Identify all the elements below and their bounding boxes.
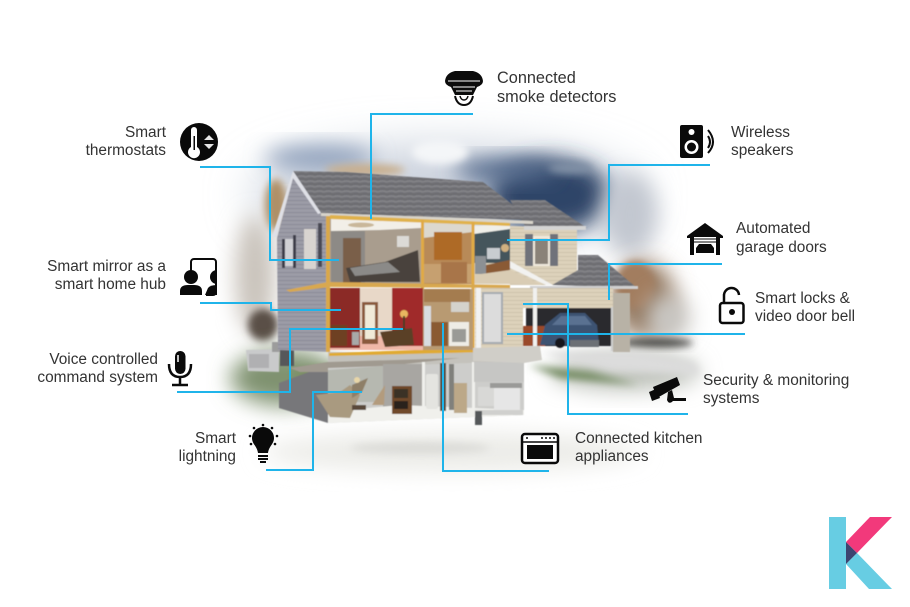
- garage pillar: [613, 293, 630, 352]
- garage with van: [523, 288, 615, 351]
- label: lighting: Smart: [195, 430, 237, 447]
- line: speakers: [507, 165, 710, 240]
- sofa and lamp: [316, 385, 360, 418]
- line: kitchen appliances: [443, 323, 549, 471]
- line: garage doors: [609, 264, 722, 300]
- line: smart locks: [507, 333, 745, 335]
- basement rooms: [316, 361, 524, 423]
- garage roof: [552, 255, 637, 288]
- label: smart mirror: smart home hub: [55, 276, 166, 293]
- icon: thermostat: [180, 123, 218, 161]
- lower floor: kitchen: [423, 289, 473, 350]
- icon: wireless speaker: [680, 125, 713, 158]
- line: lighting: [266, 392, 362, 470]
- sump pit: [475, 411, 482, 425]
- entry porch with front door: [475, 288, 536, 350]
- upper floor: bedroom: [329, 216, 423, 284]
- icon: smoke detector: [445, 71, 483, 105]
- label: voice control: command system: [37, 369, 158, 386]
- line: thermostats: [200, 167, 339, 260]
- label: smoke detectors: [497, 69, 616, 106]
- icon: security camera: [649, 377, 686, 403]
- label: voice control: [37, 351, 158, 386]
- line: smart mirror: [200, 303, 341, 310]
- basement outer wall and concrete: [279, 365, 328, 423]
- label: kitchen appliances: appliances: [575, 448, 649, 465]
- label: security: [703, 372, 849, 407]
- label: kitchen appliances: [575, 430, 702, 465]
- line: security: [523, 304, 688, 414]
- label: wireless speakers: Wireless: [731, 124, 790, 141]
- label: security: Security & monitoring: [703, 372, 849, 389]
- right wing wall: [510, 226, 577, 285]
- label: lighting: lightning: [179, 448, 236, 465]
- label: lighting: [179, 430, 237, 465]
- label: smart mirror: [47, 258, 166, 293]
- label: thermostats: thermostats: [86, 142, 166, 159]
- connector lines: [177, 114, 745, 471]
- eaves and framing: [286, 213, 533, 356]
- laundry: [478, 387, 494, 406]
- sky and clouds: [250, 140, 658, 257]
- trees: [235, 164, 693, 348]
- logo: K: [829, 517, 892, 589]
- window on wing: [525, 234, 558, 266]
- label: smart locks: [755, 290, 855, 325]
- line: smoke detectors: [371, 114, 473, 219]
- house: [246, 171, 638, 425]
- icon: padlock: [720, 288, 744, 323]
- label: garage doors: Automated: [736, 220, 810, 237]
- label: wireless speakers: speakers: [731, 142, 794, 159]
- label: garage doors: [736, 220, 827, 256]
- icon: oven: [522, 434, 558, 463]
- upper floor: office: [474, 224, 553, 285]
- label: wireless speakers: [731, 124, 794, 159]
- icon: microphone: [169, 351, 191, 385]
- left gable wall: [277, 178, 329, 352]
- stairs: [372, 385, 385, 405]
- label: smart mirror: Smart mirror as a: [47, 258, 166, 275]
- label: security: systems: [703, 390, 760, 407]
- label: kitchen appliances: Connected kitchen: [575, 430, 702, 447]
- icon: light bulb: [249, 424, 278, 463]
- tv cabinet: [392, 386, 412, 414]
- label: smart locks: Smart locks &: [755, 290, 851, 307]
- label: smoke detectors: smoke detectors: [497, 88, 616, 106]
- main roof: [293, 171, 533, 220]
- line: voice control: [177, 329, 403, 392]
- label: smoke detectors: Connected: [497, 69, 576, 87]
- icon: smart mirror: [180, 259, 217, 295]
- generator: [246, 342, 294, 372]
- label: thermostats: [86, 124, 167, 159]
- illustration: cutaway house with sky and ground: [230, 140, 700, 472]
- label: thermostats: Smart: [125, 124, 167, 141]
- ground: [230, 350, 700, 472]
- label: garage doors: garage doors: [736, 239, 827, 256]
- water heater and furnace: [426, 374, 438, 409]
- label: voice control: Voice controlled: [49, 351, 158, 368]
- label: smart locks: video door bell: [755, 308, 855, 325]
- upper floor: kitchen: [423, 222, 473, 284]
- lower floor: living and dining: [330, 288, 423, 350]
- icon: garage: [687, 223, 723, 255]
- porch base: [473, 346, 542, 363]
